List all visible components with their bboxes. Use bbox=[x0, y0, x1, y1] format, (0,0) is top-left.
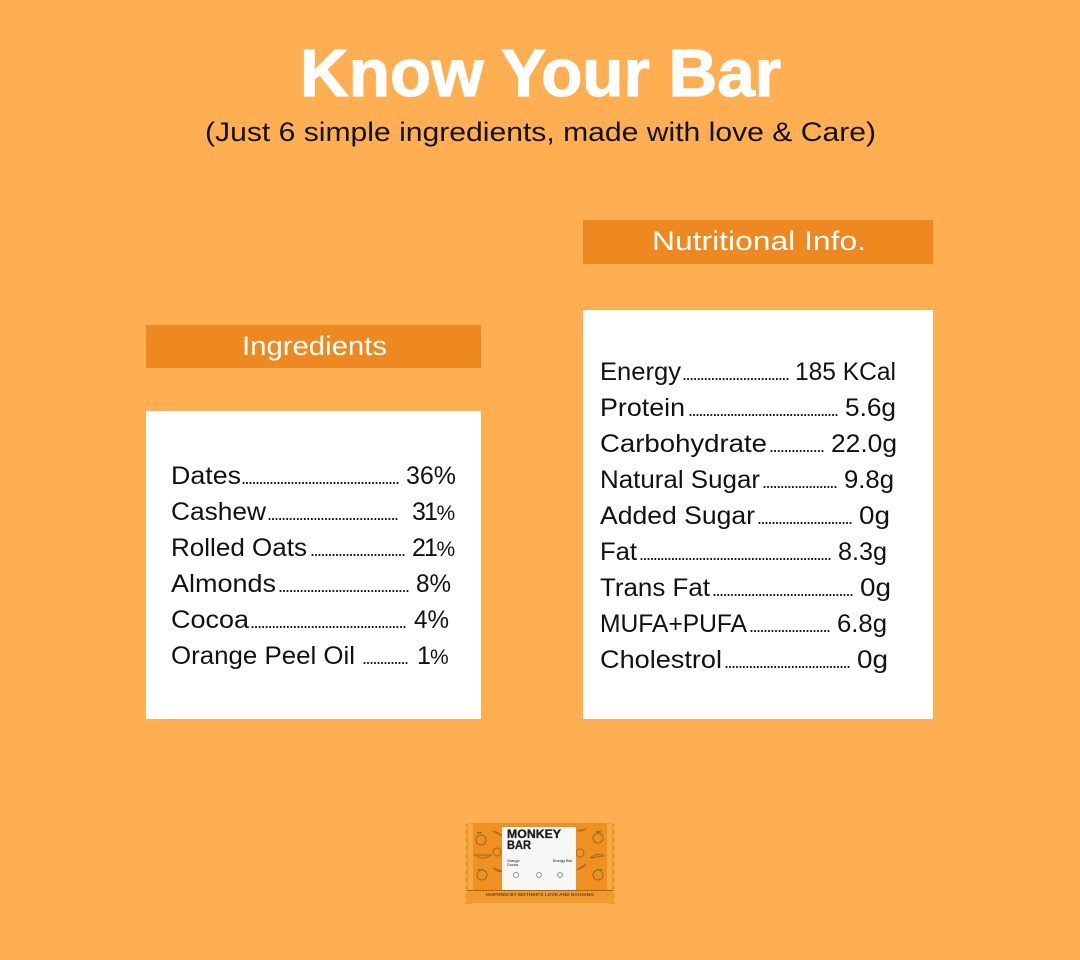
nutrition list bbox=[583, 310, 933, 719]
ingredients list: ..................................... bbox=[267, 504, 399, 524]
ingredients list: % bbox=[430, 646, 449, 669]
nutrition list: ........................................... bbox=[688, 400, 839, 420]
nutrition list: Protein bbox=[600, 394, 685, 422]
nutrition list: ..................... bbox=[762, 472, 838, 492]
nutrition list: ........................................ bbox=[712, 580, 854, 600]
nutrition list: Carbohydrate bbox=[600, 430, 767, 458]
nutrition list: .................................... bbox=[724, 652, 851, 672]
ingredients list: Dates bbox=[171, 462, 241, 490]
nutrition list: Added Sugar bbox=[600, 502, 755, 530]
ingredients list: 3 bbox=[412, 498, 426, 526]
nutrition list: Fat bbox=[600, 538, 637, 566]
ingredients list: 4% bbox=[414, 606, 449, 634]
ingredients heading bbox=[146, 325, 481, 368]
title: Know Your Bar bbox=[300, 36, 781, 111]
nutrition list: 9.8g bbox=[844, 466, 894, 494]
nutrition list: 5.6g bbox=[845, 394, 896, 422]
nutrition list: MUFA+PUFA bbox=[600, 610, 747, 638]
nutrition list: Energy bbox=[600, 358, 682, 386]
ingredients list: ............................................. bbox=[241, 468, 400, 488]
ingredients list: ............. bbox=[362, 648, 409, 668]
ingredients list: 2 bbox=[412, 534, 426, 562]
icon: monkey bar product pack bbox=[465, 823, 615, 904]
ingredients list bbox=[146, 411, 481, 719]
nutrition list: ........................... bbox=[757, 508, 853, 528]
ingredients list: ........................... bbox=[310, 540, 406, 560]
ingredients list: Orange Peel Oil bbox=[171, 642, 355, 670]
ingredients list: Cashew bbox=[171, 498, 267, 526]
ingredients list: 1 bbox=[424, 498, 438, 526]
nutrition list: ....................... bbox=[749, 616, 831, 636]
ingredients list: ..................................... bbox=[278, 576, 410, 596]
icon: monkey bar product pack: Cocoa bbox=[507, 863, 519, 867]
nutrition list: Natural Sugar bbox=[600, 466, 760, 494]
icon: monkey bar product pack: MONKEY bbox=[507, 829, 561, 841]
ingredients list: % bbox=[436, 502, 455, 525]
nutrition list: 185 KCal bbox=[795, 358, 896, 386]
nutrition list: ............... bbox=[769, 436, 825, 456]
icon: monkey bar product pack: Energy Bar bbox=[553, 859, 573, 863]
nutrition list: 8.3g bbox=[838, 538, 887, 566]
ingredients list: Cocoa bbox=[171, 606, 249, 634]
nutrition list: Cholestrol bbox=[600, 646, 722, 674]
icon: monkey bar product pack: BAR bbox=[507, 840, 532, 852]
nutrition list: Trans Fat bbox=[600, 574, 710, 602]
ingredients list: Rolled Oats bbox=[171, 534, 307, 562]
nutrition list: 6.8g bbox=[837, 610, 887, 638]
nutrition list: .............................. bbox=[682, 364, 790, 384]
ingredients heading: Ingredients bbox=[242, 331, 387, 361]
icon: monkey bar product pack: Orange bbox=[507, 859, 520, 863]
subtitle: (Just 6 simple ingredients, made with love & Care) bbox=[205, 117, 876, 147]
nutrition list: ....................................................... bbox=[639, 544, 832, 564]
nutrition list: 0g bbox=[857, 646, 888, 674]
icon: monkey bar product pack: INSPIRED BY MOTHER'S LOVE AND NAGGING bbox=[486, 892, 594, 897]
ingredients list: ............................................ bbox=[250, 612, 407, 632]
ingredients list: Almonds bbox=[171, 570, 276, 598]
ingredients list: % bbox=[436, 538, 455, 561]
nutritional info heading bbox=[583, 220, 933, 264]
nutrition list: 22.0g bbox=[831, 430, 897, 458]
panel: ingredients bbox=[146, 325, 481, 719]
nutrition list: 0g bbox=[860, 574, 891, 602]
ingredients list: 1 bbox=[417, 642, 431, 670]
nutritional info heading: Nutritional Info. bbox=[652, 226, 866, 256]
nutrition list: 0g bbox=[859, 502, 890, 530]
ingredients list: 1 bbox=[424, 534, 438, 562]
ingredients list: 8% bbox=[416, 570, 451, 598]
ingredients list: 36% bbox=[406, 462, 456, 490]
panel: nutritional info bbox=[583, 220, 933, 719]
